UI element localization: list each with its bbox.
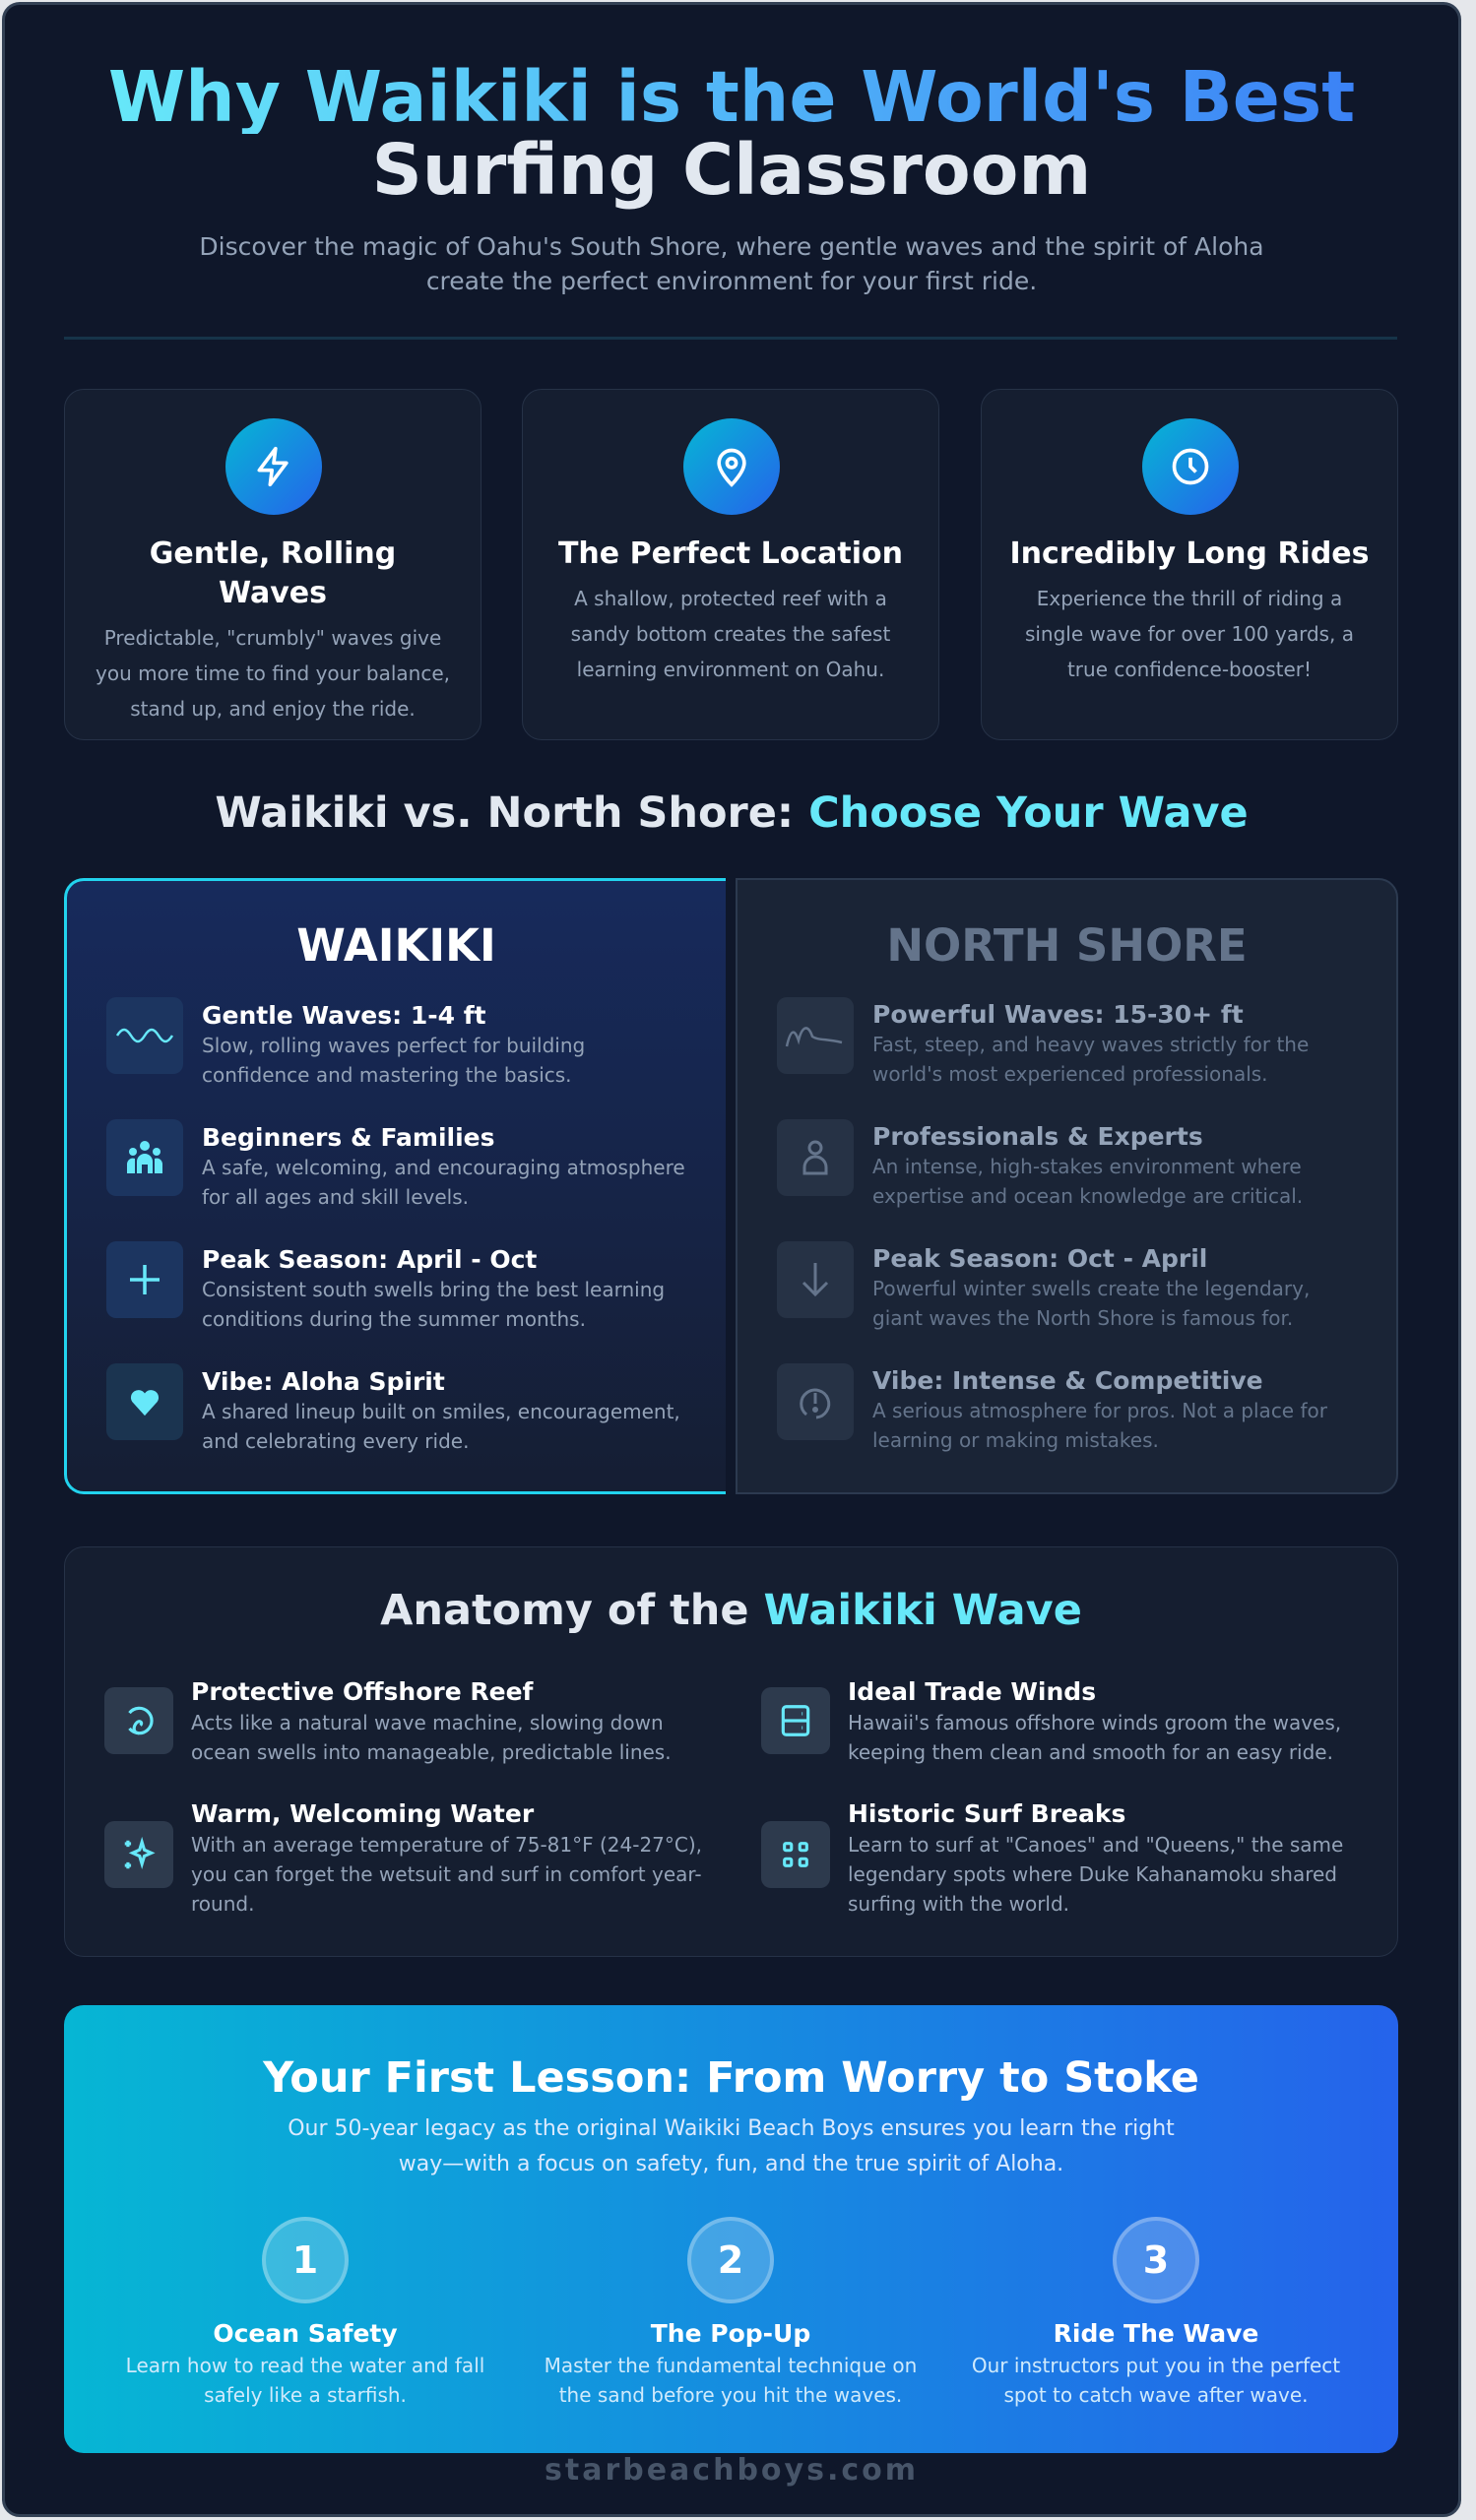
row: peak season (777, 1241, 1310, 1330)
icon: lightning (225, 418, 322, 515)
step 2: The Pop-Up (651, 2319, 810, 2348)
row: peak season: Peak Season: April - Oct (202, 1245, 537, 1274)
item: reef: Acts like a natural wave machine, slowing down (191, 1711, 664, 1734)
footer: starbeachboys.com (545, 2453, 919, 2488)
row: professionals (777, 1119, 1303, 1208)
row: beginners (106, 1119, 685, 1209)
step 2: Master the fundamental technique on (545, 2354, 917, 2377)
step 1: safely like a starfish. (204, 2383, 407, 2407)
panel: north shore: NORTH SHORE (886, 919, 1248, 972)
row: gentle waves: confidence and mastering the basics. (202, 1063, 572, 1087)
text: lesson intro: way—with a focus on safety, fun, and the true spirit of Aloha. (399, 2152, 1063, 2176)
item: reef: Protective Offshore Reef (191, 1677, 533, 1706)
row: beginners: A safe, welcoming, and encouraging atmosphere (202, 1156, 685, 1179)
card: gentle waves: Waves (219, 576, 327, 610)
step 2: 2 (718, 2238, 743, 2282)
card: long rides (981, 389, 1398, 740)
card: location: A shallow, protected reef with a sandy bottom creates the safest learning environment on Oahu. (571, 587, 890, 681)
item: reef: ocean swells into manageable, predictable lines. (191, 1740, 672, 1764)
item: surf breaks: Historic Surf Breaks (848, 1799, 1125, 1828)
row: vibe: Vibe: Aloha Spirit (202, 1367, 445, 1396)
item: warm water: Warm, Welcoming Water (191, 1799, 534, 1828)
step 1: Ocean Safety (213, 2319, 398, 2348)
card: long rides: Experience the thrill of riding a single wave for over 100 yards, a true confidence-booster! (1025, 587, 1354, 681)
row: powerful waves: world's most experienced professionals. (872, 1062, 1268, 1086)
item: trade winds (761, 1677, 1341, 1764)
subtitle: Discover the magic of Oahu's South Shore, where gentle waves and the spirit of Aloha (199, 232, 1264, 261)
title (108, 56, 1355, 211)
card: location (522, 389, 939, 740)
item: trade winds: Hawaii's famous offshore winds groom the waves, (848, 1711, 1341, 1734)
title: Surfing Classroom (372, 129, 1091, 211)
item: warm water: With an average temperature of 75-81°F (24-27°C), (191, 1833, 702, 1857)
item: surf breaks (761, 1799, 1343, 1916)
row: beginners: for all ages and skill levels. (202, 1185, 469, 1209)
title: Why Waikiki is the World's Best (108, 56, 1355, 138)
row: beginners: Beginners & Families (202, 1123, 495, 1152)
row: powerful waves: Powerful Waves: 15-30+ ft (872, 1000, 1244, 1029)
panel: anatomy (64, 1546, 1398, 1957)
card: location: The Perfect Location (558, 536, 903, 571)
row: powerful waves: Fast, steep, and heavy waves strictly for the (872, 1033, 1309, 1056)
row: vibe: A shared lineup built on smiles, encouragement, (202, 1400, 680, 1423)
row: powerful waves (777, 997, 1309, 1086)
row: peak season: Powerful winter swells create the legendary, (872, 1277, 1310, 1300)
panel: north shore (736, 878, 1398, 1494)
icon: clock (1142, 418, 1239, 515)
row: vibe: A serious atmosphere for pros. Not a place for (872, 1399, 1327, 1422)
row: peak season (106, 1241, 665, 1331)
item: warm water (104, 1799, 702, 1916)
row: gentle waves (106, 997, 585, 1087)
text: lesson intro: Our 50-year legacy as the original Waikiki Beach Boys ensures you learn the right (288, 2116, 1175, 2141)
heading: anatomy: Anatomy of the Waikiki Wave (380, 1586, 1082, 1635)
row: professionals: expertise and ocean knowledge are critical. (872, 1184, 1303, 1208)
row: vibe (777, 1363, 1327, 1452)
subtitle: create the perfect environment for your first ride. (426, 267, 1037, 295)
card: long rides: Incredibly Long Rides (1009, 536, 1370, 571)
row: vibe: Vibe: Intense & Competitive (872, 1366, 1263, 1395)
item: trade winds: keeping them clean and smooth for an easy ride. (848, 1740, 1333, 1764)
row: vibe (106, 1363, 680, 1453)
panel: waikiki: WAIKIKI (296, 919, 496, 972)
item: surf breaks: Learn to surf at "Canoes" and "Queens," the same (848, 1833, 1343, 1857)
item: surf breaks: legendary spots where Duke Kahanamoku shared (848, 1862, 1337, 1886)
heading: first lesson: Your First Lesson: From Worry to Stoke (263, 2053, 1199, 2103)
row: gentle waves: Gentle Waves: 1-4 ft (202, 1001, 486, 1030)
row: vibe: learning or making mistakes. (872, 1428, 1159, 1452)
step 2: the sand before you hit the waves. (559, 2383, 902, 2407)
row: vibe: and celebrating every ride. (202, 1429, 469, 1453)
card: gentle waves: Gentle, Rolling (150, 536, 396, 571)
row: gentle waves: Slow, rolling waves perfect for building (202, 1034, 585, 1057)
step 1: 1 (292, 2238, 318, 2282)
item: warm water: round. (191, 1892, 254, 1916)
row: peak season: conditions during the summer months. (202, 1307, 586, 1331)
icon: map pin (683, 418, 780, 515)
panel: first lesson (64, 2005, 1398, 2453)
row: peak season: Peak Season: Oct - April (872, 1244, 1207, 1273)
card: gentle waves (64, 389, 481, 740)
step 3: Our instructors put you in the perfect (972, 2354, 1340, 2377)
item: warm water: you can forget the wetsuit and surf in comfort year- (191, 1862, 702, 1886)
heading: comparison: Waikiki vs. North Shore: Choose Your Wave (215, 788, 1249, 838)
step 3 (972, 2217, 1340, 2407)
row: peak season: Consistent south swells bring the best learning (202, 1278, 665, 1301)
item: reef (104, 1677, 672, 1764)
step 1: Learn how to read the water and fall (126, 2354, 484, 2377)
step 3: 3 (1143, 2238, 1169, 2282)
item: trade winds: Ideal Trade Winds (848, 1677, 1096, 1706)
step 3: spot to catch wave after wave. (1003, 2383, 1308, 2407)
item: surf breaks: surfing with the world. (848, 1892, 1069, 1916)
panel: waikiki (64, 878, 726, 1494)
row: peak season: giant waves the North Shore is famous for. (872, 1306, 1293, 1330)
row: professionals: Professionals & Experts (872, 1122, 1203, 1151)
step 1 (126, 2217, 484, 2407)
step 2 (545, 2217, 917, 2407)
subtitle (199, 232, 1264, 295)
row: professionals: An intense, high-stakes environment where (872, 1155, 1302, 1178)
step 3: Ride The Wave (1054, 2319, 1258, 2348)
card: gentle waves: Predictable, "crumbly" waves give you more time to find your balance, stand up, and enjoy the ride. (96, 626, 450, 721)
text: lesson intro (288, 2116, 1175, 2176)
